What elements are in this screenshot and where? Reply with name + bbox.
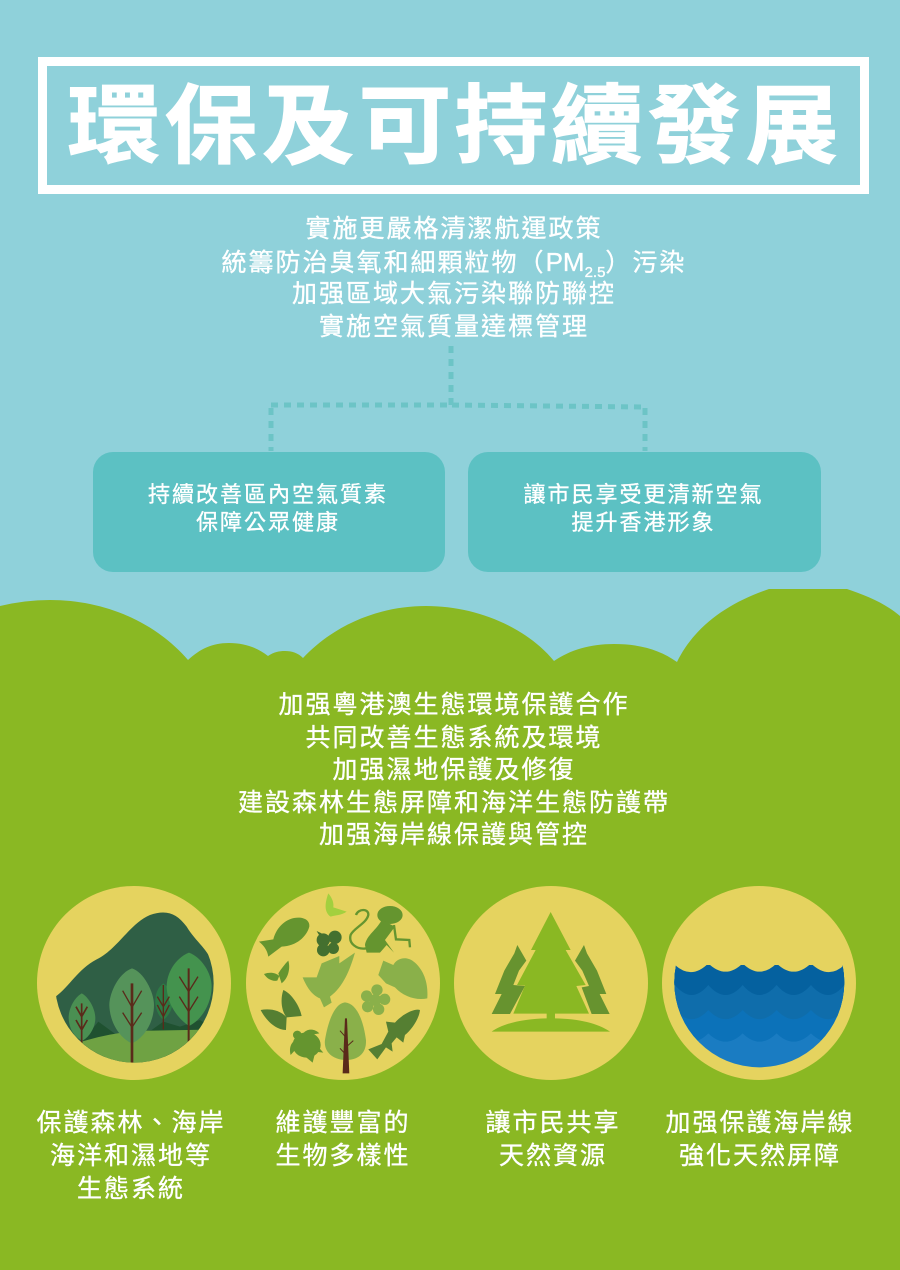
dark leaf <box>317 931 342 956</box>
title: 發 <box>648 56 740 181</box>
caption: biodiversity: 維護豐富的 <box>275 1109 410 1137</box>
air quality policy text: 統籌防治臭氧和細顆粒物（PM2.5）污染 <box>222 247 686 281</box>
caption: natural resources <box>485 1109 620 1170</box>
title: 環 <box>68 56 160 181</box>
panel: cleaner air benefit: 讓市民享受更清新空氣 <box>523 482 764 507</box>
panel: air quality benefit: 持續改善區內空氣質素 <box>148 482 388 507</box>
ecology policy text: 加强粵港澳生態環境保護合作 <box>278 691 630 719</box>
flower <box>361 984 390 1015</box>
icon: forest and mountain <box>37 886 231 1080</box>
caption: coastline <box>665 1109 854 1170</box>
fish <box>259 918 309 957</box>
turtle <box>290 1030 323 1063</box>
caption: natural resources: 天然資源 <box>499 1142 607 1170</box>
ecology policy text: 共同改善生態系統及環境 <box>305 724 602 752</box>
top butterfly <box>326 893 347 917</box>
air quality policy text: 加强區域大氣污染聯防聯控 <box>292 280 616 308</box>
panel: cleaner air benefit <box>468 452 821 572</box>
ecology policy text: 加强海岸線保護與管控 <box>319 821 589 849</box>
small butterfly <box>264 961 289 983</box>
panel: air quality benefit <box>93 452 445 572</box>
tree <box>325 1002 366 1060</box>
caption: ecosystems: 保護森林、海岸 <box>36 1109 226 1137</box>
caption: ecosystems: 海洋和濕地等 <box>50 1142 212 1170</box>
bird <box>303 953 355 1007</box>
title: 展 <box>746 56 838 181</box>
monkey <box>365 906 403 953</box>
ecology policy text: 加强濕地保護及修復 <box>332 756 576 784</box>
air quality policy text: 實施更嚴格清潔航運政策 <box>305 215 602 243</box>
caption: coastline: 加强保護海岸線 <box>665 1109 854 1137</box>
air quality policy text: 實施空氣質量達標管理 <box>319 313 589 341</box>
caption: ecosystems <box>36 1109 226 1203</box>
title <box>68 56 838 181</box>
title: 可 <box>358 56 452 181</box>
title: 及 <box>262 56 354 181</box>
panel: cleaner air benefit: 提升香港形象 <box>571 510 716 535</box>
icon: sea waves <box>662 886 856 1080</box>
ecology policy text: 建設森林生態屏障和海洋生態防護帶 <box>238 789 670 817</box>
dark butterfly <box>261 990 302 1030</box>
dotted connector <box>268 346 648 451</box>
title frame <box>38 57 869 194</box>
panel: air quality benefit: 保障公眾健康 <box>196 510 340 535</box>
flat fish <box>378 958 427 999</box>
title: 續 <box>550 56 644 181</box>
caption: biodiversity <box>275 1109 410 1170</box>
caption: biodiversity: 生物多樣性 <box>275 1142 410 1170</box>
ecology policy text <box>238 691 670 849</box>
caption: ecosystems: 生態系統 <box>77 1175 185 1203</box>
air quality policy text <box>222 215 686 341</box>
caption: natural resources: 讓市民共享 <box>485 1109 620 1137</box>
title: 持 <box>454 56 548 181</box>
icon: biodiversity animals and plants <box>246 886 440 1080</box>
title: 保 <box>164 56 258 181</box>
icon: pine trees <box>454 886 648 1080</box>
caption: coastline: 強化天然屏障 <box>679 1142 841 1170</box>
trout <box>368 1010 420 1059</box>
